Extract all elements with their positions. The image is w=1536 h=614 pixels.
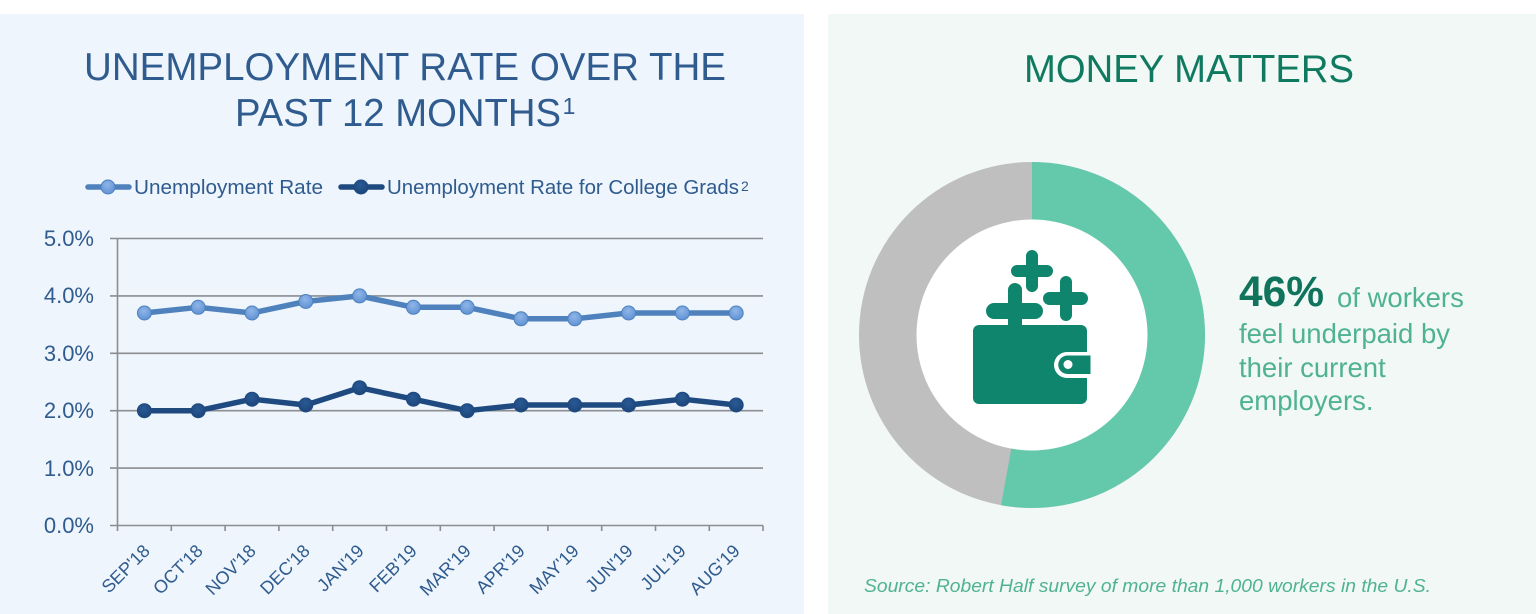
line series: college grads — [137, 381, 743, 418]
x axis labels: MAR'19 — [416, 541, 475, 600]
legend — [88, 176, 749, 199]
grid lines and axes — [110, 238, 763, 531]
x axis labels: AUG'19 — [686, 541, 744, 599]
y axis labels: 3.0% — [44, 341, 94, 366]
x axis labels: MAY'19 — [525, 541, 583, 598]
line series: unemployment rate — [137, 289, 743, 326]
source note: Source: Robert Half survey of more than 1,000 workers in the U.S. — [864, 575, 1431, 596]
x axis labels: JUL'19 — [636, 541, 690, 594]
callout: 46% of workers: employers. — [1239, 385, 1374, 416]
legend: Unemployment Rate — [134, 176, 323, 199]
x axis labels: NOV'18 — [202, 541, 260, 599]
x axis labels: JUN'19 — [581, 541, 637, 596]
y axis labels: 5.0% — [44, 226, 94, 251]
y axis labels: 0.0% — [44, 513, 94, 538]
chart title: PAST 12 MONTHS — [235, 92, 561, 135]
callout: 46% of workers: their current — [1239, 352, 1386, 383]
icon: wallet with plus signs — [973, 250, 1090, 404]
x axis labels: JAN'19 — [313, 541, 368, 595]
y axis labels: 2.0% — [44, 398, 94, 423]
x axis labels — [98, 541, 744, 600]
x axis labels: SEP'18 — [98, 541, 154, 597]
legend: Unemployment Rate for College Grads — [387, 176, 739, 199]
chart title: 1 — [563, 93, 575, 119]
y axis labels: 4.0% — [44, 283, 94, 308]
chart title: UNEMPLOYMENT RATE OVER THE — [84, 46, 726, 89]
panel heading: MONEY MATTERS — [1024, 48, 1354, 91]
chart title — [84, 46, 726, 135]
callout: 46% of workers: feel underpaid by — [1239, 318, 1450, 349]
x axis labels: FEB'19 — [365, 541, 421, 596]
donut chart — [859, 162, 1205, 508]
y axis labels: 1.0% — [44, 456, 94, 481]
panel: unemployment chart — [0, 14, 804, 614]
x axis labels: OCT'18 — [149, 541, 207, 598]
y axis labels — [44, 226, 94, 538]
legend: 2 — [741, 178, 749, 194]
callout: 46% of workers: 46% — [1239, 269, 1324, 316]
callout: 46% of workers: of workers — [1337, 282, 1464, 313]
panel: money matters — [828, 14, 1536, 614]
x axis labels: DEC'18 — [256, 541, 314, 598]
x axis labels: APR'19 — [472, 541, 529, 598]
callout: 46% of workers — [1239, 269, 1464, 416]
